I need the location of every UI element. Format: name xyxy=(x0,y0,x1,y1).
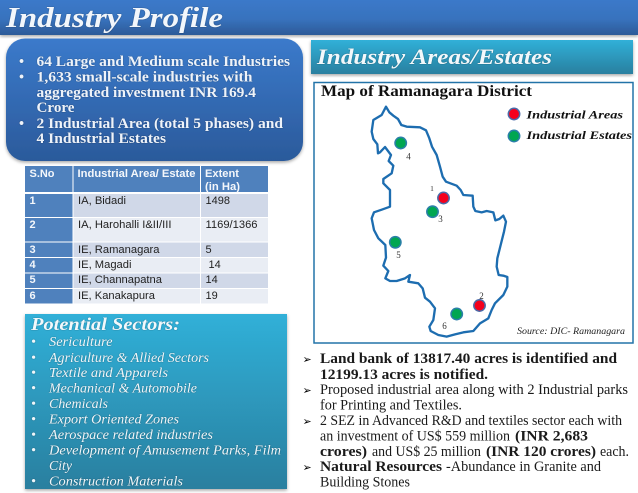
statistics bullet list: aggregated investment INR 169.4 xyxy=(36,85,256,101)
text block: land and resources bullets xyxy=(302,351,629,490)
sectors bullet list: Development of Amusement Parks, Film xyxy=(48,444,281,458)
map marker: industrial area 2 xyxy=(474,291,485,311)
bullet: natural resources: Natural Resources xyxy=(320,459,442,475)
map marker: industrial area 1 xyxy=(430,184,449,204)
sectors bullet list: • xyxy=(31,382,36,396)
map marker: estate 4 xyxy=(395,137,411,162)
table body text: IA, Bidadi xyxy=(78,195,126,207)
table body text: IA, Harohalli I&II/III xyxy=(78,219,172,231)
statistics bullet list xyxy=(19,54,290,147)
table body text: IE, Channapatna xyxy=(78,274,163,286)
bullet: SEZ investment: an investment of US$ 559 million xyxy=(320,428,511,444)
map source note: Source: DIC- Ramanagara xyxy=(517,327,625,337)
statistics bullet list: 4 Industrial Estates xyxy=(36,131,166,147)
bullet: natural resources xyxy=(302,459,602,490)
map marker: industrial area 1: 1 xyxy=(430,184,434,193)
title banner xyxy=(0,0,638,35)
sectors bullet list: • xyxy=(31,335,36,350)
heading text: Industry Areas/Estates xyxy=(316,44,552,69)
sectors bullet list: • xyxy=(31,474,36,490)
bullet: SEZ investment xyxy=(302,413,629,460)
panel: district map xyxy=(314,82,633,343)
sectors bullet list: • xyxy=(31,412,36,428)
bullet: SEZ investment: crores) xyxy=(320,444,367,460)
sectors bullet list: • xyxy=(31,397,36,412)
table header text: S.No xyxy=(30,168,55,180)
sectors bullet list: • xyxy=(31,444,36,458)
statistics bullet list: 1,633 small-scale industries with xyxy=(36,70,253,86)
table row numbers: 3 xyxy=(30,244,36,256)
map marker: estate 4: 4 xyxy=(406,152,411,162)
statistics bullet list: • xyxy=(19,70,24,86)
bullet: proposed parks: Proposed industrial area along with 2 Industrial parks xyxy=(320,382,628,398)
panel: key statistics xyxy=(6,38,303,161)
table body text: IE, Ramanagara xyxy=(78,244,160,256)
statistics bullet list: Crore xyxy=(36,100,75,116)
bullet: land bank: 12199.13 acres is notified. xyxy=(320,367,488,383)
sectors bullet list: Chemicals xyxy=(49,397,109,412)
table body text: IE, Kanakapura xyxy=(78,290,156,302)
map marker: industrial area 2: 2 xyxy=(479,291,484,301)
bullet: SEZ investment: (INR 2,683 xyxy=(515,428,588,444)
map outline xyxy=(372,107,507,337)
bullet: proposed parks xyxy=(302,382,628,414)
table header text: (in Ha) xyxy=(205,181,240,193)
table row numbers: 2 xyxy=(30,219,36,231)
sectors bullet list xyxy=(31,335,281,490)
panel: industry areas heading xyxy=(311,40,633,74)
bullet: proposed parks: ➢ xyxy=(302,384,312,397)
bullet: SEZ investment: (INR 120 crores) xyxy=(486,444,596,460)
table body text: 14 xyxy=(206,274,218,286)
table body text: 1169/1366 xyxy=(206,219,258,231)
table row numbers: 5 xyxy=(30,274,36,286)
bullet: SEZ investment: 2 SEZ in Advanced R&D and textiles sector each with xyxy=(320,413,623,429)
panel: potential sectors xyxy=(25,314,287,490)
sectors bullet list: Agriculture & Allied Sectors xyxy=(48,351,210,366)
bullet: SEZ investment: and US$ 25 million xyxy=(372,444,482,460)
table body text: IE, Magadi xyxy=(78,259,132,271)
title: Industry Profile xyxy=(5,2,223,34)
bullet: SEZ investment: each. xyxy=(600,444,629,460)
map marker: estate 6 xyxy=(442,308,462,331)
statistics bullet list: 2 Industrial Area (total 5 phases) and xyxy=(36,116,283,132)
statistics bullet list: 64 Large and Medium scale Industries xyxy=(36,54,290,70)
map marker: estate 3 xyxy=(427,206,443,224)
table: industrial areas and estates xyxy=(25,166,268,304)
sectors bullet list: • xyxy=(31,428,36,443)
sectors bullet list: City xyxy=(49,459,73,474)
table body text: 1498 xyxy=(206,195,230,207)
table header text xyxy=(30,168,240,193)
sectors bullet list: Construction Materials xyxy=(49,474,184,490)
bullet: land bank xyxy=(302,351,617,383)
legend: industrial areas: Industrial Areas xyxy=(525,108,623,122)
table row numbers: 6 xyxy=(30,290,36,302)
bullet: SEZ investment: ➢ xyxy=(302,415,312,428)
bullet: proposed parks: for Printing and Textiles. xyxy=(320,398,462,414)
bullet: natural resources: -Abundance in Granite and xyxy=(446,459,602,475)
table body text: 5 xyxy=(206,244,212,256)
statistics bullet list: • xyxy=(19,116,24,132)
table body text xyxy=(78,195,258,302)
table body text: 19 xyxy=(206,290,218,302)
map marker: estate 3: 3 xyxy=(438,214,443,224)
sectors bullet list: Export Oriented Zones xyxy=(48,412,180,428)
bullet: land bank: ➢ xyxy=(302,353,312,366)
table body text: 14 xyxy=(208,259,221,271)
map marker: estate 6: 6 xyxy=(442,321,447,331)
sectors bullet list: Aerospace related industries xyxy=(48,428,214,443)
sectors bullet list: • xyxy=(31,351,36,366)
bullet: land bank: Land bank of 13817.40 acres is identified and xyxy=(320,351,617,367)
bullet: natural resources: Building Stones xyxy=(320,474,410,490)
sectors bullet list: Textile and Apparels xyxy=(49,366,169,381)
sectors bullet list: Sericulture xyxy=(49,335,112,350)
table header text: Industrial Area/ Estate xyxy=(78,168,196,180)
map marker: estate 5: 5 xyxy=(396,250,401,260)
table row numbers: 4 xyxy=(30,259,36,271)
statistics bullet list: • xyxy=(19,54,24,70)
bullet: natural resources: ➢ xyxy=(302,461,312,474)
sectors bullet list: Mechanical & Automobile xyxy=(48,382,197,396)
table row numbers xyxy=(30,195,36,302)
table header text: Extent xyxy=(205,168,239,180)
sectors bullet list: • xyxy=(31,366,36,381)
map marker: estate 5 xyxy=(390,237,401,260)
table row numbers: 1 xyxy=(30,195,36,207)
legend: industrial estates: Industrial Estates xyxy=(525,128,632,142)
map title: Map of Ramanagara District xyxy=(321,83,533,100)
potential sectors heading: Potential Sectors: xyxy=(30,314,180,334)
